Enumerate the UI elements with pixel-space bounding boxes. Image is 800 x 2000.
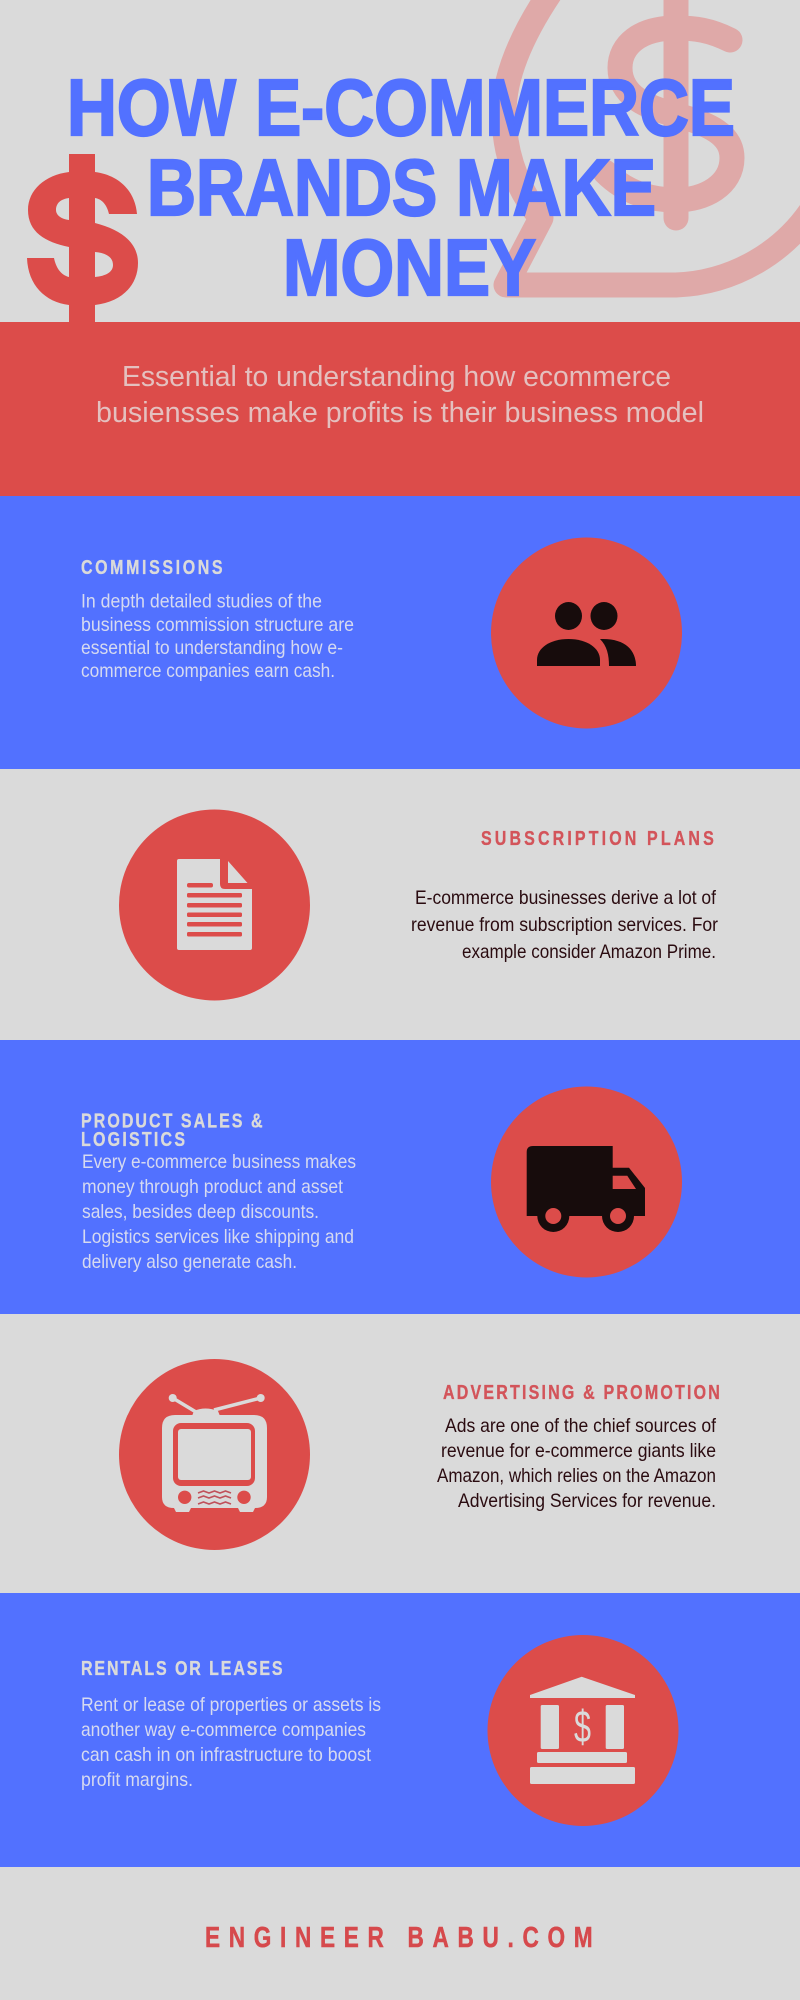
heading: commissions: COMMISSIONS (81, 556, 223, 578)
icon: people in red circle (491, 538, 682, 728)
icon: truck in red circle (491, 1086, 682, 1278)
icon: document in red circle (119, 810, 310, 1000)
text: product sales body: Logistics services like shipping and (82, 1226, 354, 1248)
heading: product sales and logistics: LOGISTICS (81, 1128, 185, 1150)
title: BRANDS MAKE (147, 143, 656, 232)
icon: television in red circle (119, 1359, 310, 1550)
panel: product sales and logistics (0, 1040, 800, 1314)
text: rentals body: Rent or lease of properties or assets is (81, 1694, 381, 1716)
intro text: Essential to understanding how ecommerce (122, 361, 671, 393)
panel: commissions (0, 496, 800, 769)
text: product sales body: delivery also generate cash. (82, 1251, 297, 1273)
text: commissions body: In depth detailed studies of the (81, 590, 322, 612)
title: MONEY (283, 223, 536, 312)
icon: bank in red circle: $ (574, 1702, 591, 1753)
icon: large faded dollar speech bubble (504, 0, 800, 285)
panel: rentals or leases (0, 1593, 800, 1867)
text: commissions body: essential to understanding how e- (81, 637, 343, 659)
text: advertising body (437, 1415, 717, 1512)
text: commissions body: business commission structure are (81, 614, 354, 636)
text: subscription body: revenue from subscription services. For (411, 914, 718, 936)
footer text: ENGINEER BABU.COM (205, 1920, 593, 1954)
text: commissions body (81, 590, 354, 682)
panel: subscription plans (0, 769, 800, 1040)
text: advertising body: Ads are one of the chief sources of (445, 1415, 717, 1437)
text: rentals body: profit margins. (81, 1769, 193, 1791)
icon: bank in red circle (488, 1635, 678, 1826)
text: product sales body (82, 1151, 356, 1273)
heading: product sales and logistics: PRODUCT SALES & (81, 1110, 263, 1132)
text: subscription body: E-commerce businesses derive a lot of (415, 887, 717, 909)
heading: product sales and logistics (81, 1110, 263, 1150)
text: rentals body (81, 1694, 381, 1791)
title (67, 63, 735, 312)
text: subscription body (411, 887, 718, 963)
heading: advertising and promotion: ADVERTISING & PROMOTION (443, 1381, 720, 1403)
intro text (96, 361, 704, 429)
text: product sales body: money through product and asset (82, 1176, 344, 1198)
panel: intro band (0, 322, 800, 496)
text: advertising body: Advertising Services for revenue. (458, 1490, 716, 1512)
footer (0, 1867, 800, 2000)
text: product sales body: sales, besides deep discounts. (82, 1201, 319, 1223)
intro text: busiensses make profits is their business model (96, 397, 704, 429)
heading: subscription plans: SUBSCRIPTION PLANS (481, 827, 714, 849)
text: rentals body: can cash in on infrastructure to boost (81, 1744, 372, 1766)
text: rentals body: another way e-commerce companies (81, 1719, 366, 1741)
heading: rentals or leases: RENTALS OR LEASES (81, 1657, 283, 1679)
text: subscription body: example consider Amazon Prime. (462, 941, 716, 963)
text: commissions body: commerce companies earn cash. (81, 660, 335, 682)
text: product sales body: Every e-commerce business makes (82, 1151, 356, 1173)
panel: advertising and promotion (0, 1314, 800, 1593)
icon: red dollar sign (27, 154, 138, 322)
text: advertising body: Amazon, which relies on the Amazon (437, 1465, 716, 1487)
panel: header (27, 0, 800, 322)
text: advertising body: revenue for e-commerce giants like (441, 1440, 716, 1462)
